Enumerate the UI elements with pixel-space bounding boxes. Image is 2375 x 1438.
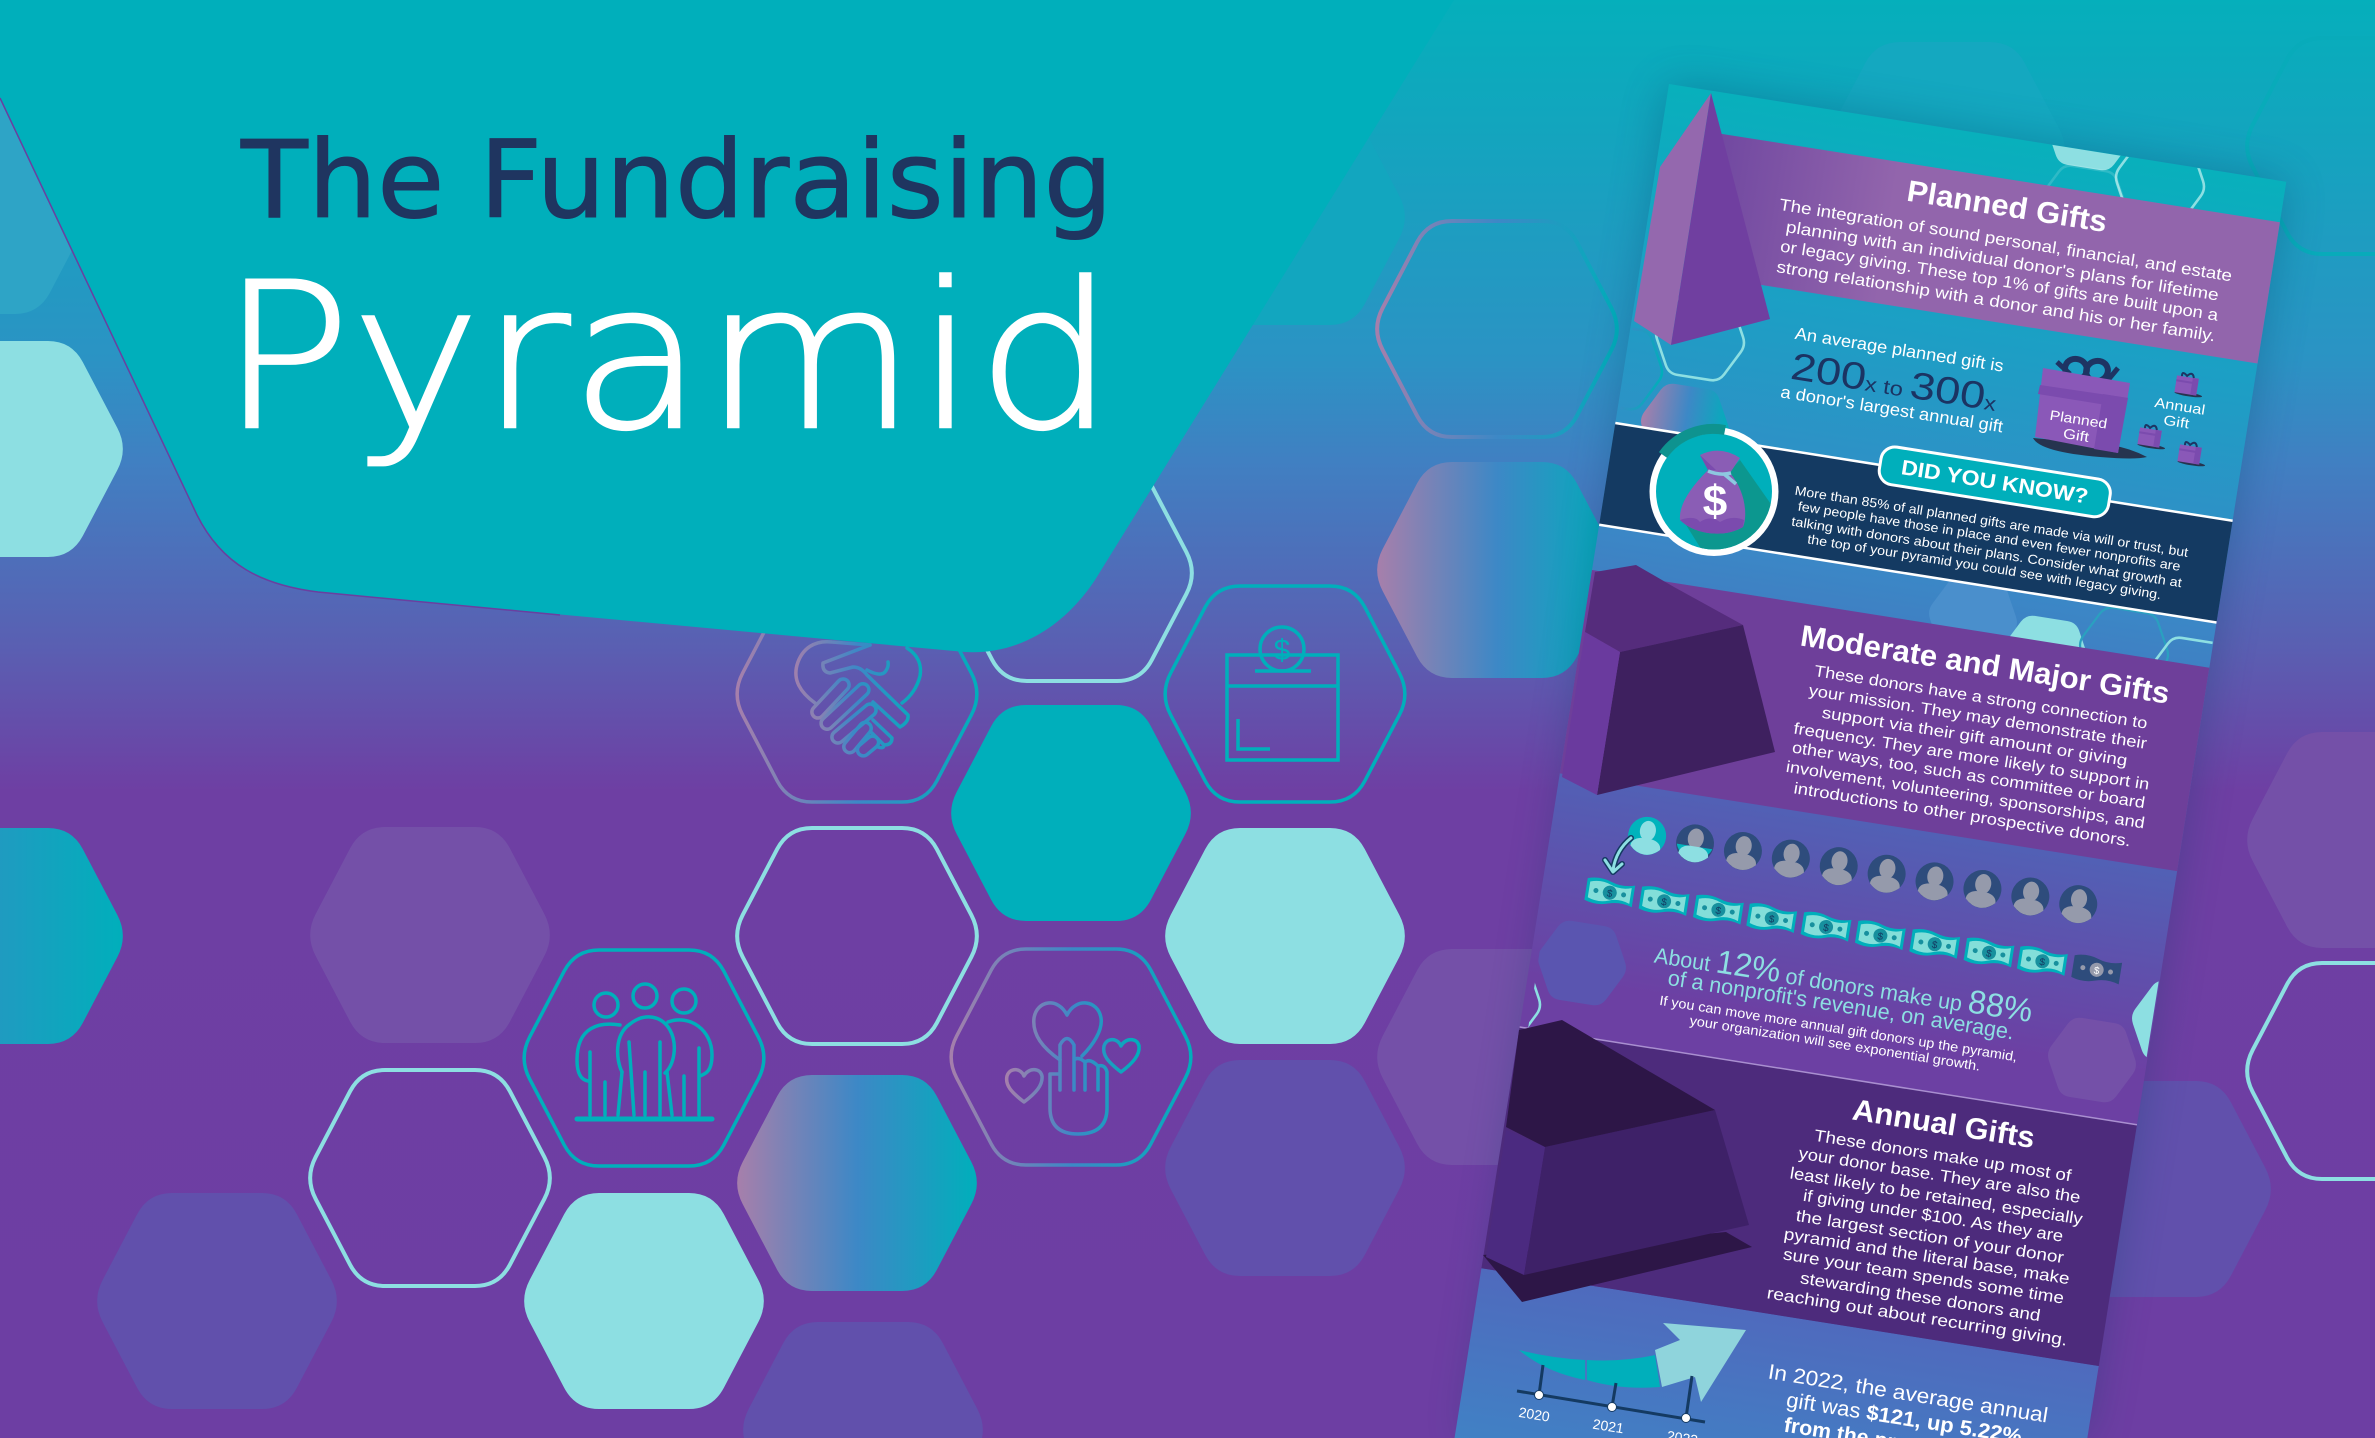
sheet shadow	[1467, 84, 2286, 1438]
body text: planned gifts: strong relationship with a donor and his or her family.	[1775, 258, 2217, 345]
icon: money bag badge	[1650, 427, 1778, 556]
body text: moderate and major gifts: involvement, volunteering, sponsorships, and	[1785, 759, 2146, 832]
chart: annual gift growth arrow timeline	[1517, 1323, 1746, 1422]
body text: moderate and major gifts: support via their gift amount or giving	[1821, 705, 2128, 770]
bill icons row: $	[1985, 948, 1993, 960]
donor icons row	[1625, 814, 2100, 926]
body text: planned gifts: planning with an individual donor's plans for lifetime	[1785, 218, 2220, 304]
statistic text	[1654, 948, 2031, 1070]
body text: did you know: few people have those in place and even fewer nonprofits are	[1797, 498, 2182, 574]
statistic text: your organization will see exponential growth.	[1689, 1013, 1981, 1074]
sheet background	[1455, 84, 2286, 1438]
body text: planned gifts	[1768, 196, 2233, 347]
bill icons row: $	[1606, 888, 1614, 900]
body text: moderate and major gifts: other ways, too, such as committee or board	[1791, 740, 2146, 812]
body text: annual gifts	[1766, 1123, 2094, 1350]
bottom statistic text: In 2022, the average annual	[1766, 1361, 2050, 1428]
bill icons row: $	[1768, 914, 1776, 926]
stat: 200x to 300x	[1781, 328, 2004, 433]
body text: annual gifts: These donors make up most of	[1813, 1127, 2073, 1185]
body text: did you know: the top of your pyramid you could see with legacy giving.	[1806, 531, 2162, 602]
infographic sheet	[1446, 82, 2286, 1438]
body text: planned gifts: or legacy giving. These top 1% of gifts are built upon a	[1779, 238, 2220, 325]
statistic text: If you can move more annual gift donors up the pyramid,	[1658, 993, 2018, 1064]
bill icons row	[1584, 876, 2122, 986]
pyramid base piece	[1483, 1020, 1752, 1302]
title line: The Fundraising: The Fundraising	[240, 119, 1113, 243]
body text: annual gifts: stewarding these donors and	[1799, 1269, 2042, 1325]
gift labels: Gift	[2062, 425, 2090, 445]
bill icons row: $	[1822, 923, 1830, 934]
bill icons row: $	[1877, 931, 1884, 943]
body text: did you know: More than 85% of all planned gifts are made via will or trust, but	[1794, 483, 2190, 560]
icon: money bag badge: $	[1703, 477, 1727, 526]
body text: did you know	[1787, 483, 2190, 605]
body text: moderate and major gifts	[1782, 661, 2161, 852]
bill icons row: $	[1660, 897, 1668, 909]
bill icons row: $	[1715, 906, 1722, 917]
heading: Annual Gifts: Annual Gifts	[1850, 1094, 2037, 1155]
statistic text: of a nonprofit's revenue, on average.	[1666, 965, 2016, 1044]
pyramid top piece	[1634, 93, 1770, 345]
body text: annual gifts: if giving under $100. As they are	[1802, 1187, 2064, 1246]
panel: annual gifts	[1481, 1026, 2137, 1366]
body text: annual gifts: sure your team spends some time	[1782, 1245, 2065, 1308]
bill icons row: $	[2093, 965, 2100, 977]
panel: moderate and major gifts	[1560, 570, 2209, 871]
body text: moderate and major gifts: These donors have a strong connection to	[1813, 663, 2149, 733]
body text: annual gifts: reaching out about recurring giving.	[1766, 1284, 2069, 1350]
panel: 12 percent statistic	[1584, 816, 2122, 1070]
statistic text: About 12% of donors make up 88%	[1652, 933, 2035, 1029]
gift labels: Annual	[2153, 394, 2206, 418]
body text: annual gifts: least likely to be retained, especially	[1789, 1164, 2085, 1229]
bottom statistic text	[1518, 1364, 2048, 1438]
body text: moderate and major gifts: introductions to other prospective donors.	[1792, 780, 2132, 850]
bill icons row: $	[1931, 940, 1939, 952]
gift labels: Planned	[2049, 407, 2109, 432]
icon hexagon: heart and hand	[951, 949, 1191, 1165]
title banner	[0, 0, 1454, 652]
bill icons row: $	[2039, 957, 2046, 969]
panel: planned gifts	[1722, 134, 2280, 433]
body text: annual gifts: pyramid and the literal base, make	[1783, 1225, 2071, 1288]
gift labels: Gift	[2162, 412, 2191, 431]
icon hexagon: handshake	[737, 586, 977, 802]
bottom statistic text: 2020	[1518, 1404, 1551, 1425]
icon: gift boxes	[2033, 356, 2208, 467]
panel: did you know	[1599, 403, 2236, 624]
body text: annual gifts: your donor base. They are also the	[1797, 1145, 2082, 1207]
body text: annual gifts: the largest section of your donor	[1795, 1207, 2066, 1267]
title line: Pyramid: Pyramid	[220, 239, 1115, 475]
stat: 200x to 300x: a donor's largest annual gift	[1779, 382, 2005, 436]
icon hexagon: donation box	[1165, 586, 1405, 802]
sheet decorative hexagons	[1446, 82, 2242, 1106]
body text: planned gifts: The integration of sound personal, financial, and estate	[1778, 196, 2233, 285]
body text: did you know: talking with donors about their plans. Consider what growth at	[1790, 514, 2183, 590]
icon hexagon: group of people	[524, 950, 764, 1166]
stat: 200x to 300x: An average planned gift is	[1794, 324, 2005, 376]
badge: did you know	[1877, 445, 2112, 519]
heading: Planned Gifts: Planned Gifts	[1905, 175, 2109, 239]
pyramid middle piece	[1562, 565, 1775, 795]
icon hexagon: donation box: $	[1274, 634, 1291, 667]
body text: moderate and major gifts: frequency. They are more likely to support in	[1792, 721, 2151, 794]
arrow: donor to bill	[1605, 838, 1631, 872]
body text: moderate and major gifts: your mission. They may demonstrate their	[1807, 682, 2149, 753]
stat: 200x to 300x: 200 x to 300 x	[1788, 346, 2000, 420]
bottom statistic text: 2021	[1592, 1416, 1625, 1436]
heading: Moderate and Major Gifts: Moderate and Major Gifts	[1798, 620, 2172, 711]
badge: did you know: DID YOU KNOW?	[1900, 456, 2090, 508]
gift labels	[2050, 398, 2205, 442]
